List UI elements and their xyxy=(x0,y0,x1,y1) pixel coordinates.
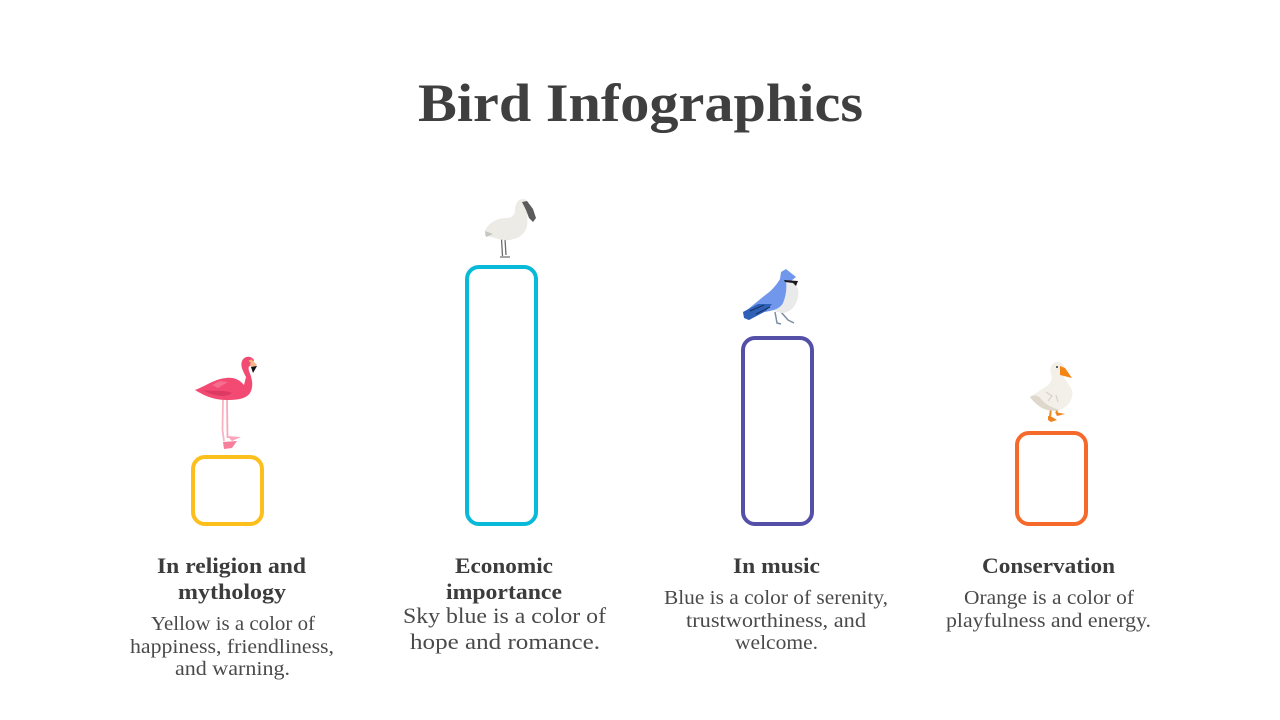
panel: in religion and mythology xyxy=(130,357,334,680)
text: blue description xyxy=(664,587,888,654)
icon: blue jay xyxy=(743,269,798,324)
heading: conservation: Conservation xyxy=(982,553,1115,578)
text: yellow description: and warning. xyxy=(175,658,290,680)
bar: purple outline xyxy=(743,338,812,524)
bar: yellow outline xyxy=(193,457,262,524)
text: orange description xyxy=(946,587,1151,632)
bar: orange outline xyxy=(1017,433,1086,524)
text: sky blue description: hope and romance. xyxy=(410,629,600,654)
text: yellow description: Yellow is a color of xyxy=(151,613,315,635)
text: blue description: trustworthiness, and xyxy=(686,610,866,632)
text: sky blue description xyxy=(403,603,607,654)
heading: economic importance: importance xyxy=(446,579,562,604)
text: orange description: Orange is a color of xyxy=(964,587,1134,609)
text: orange description: playfulness and energy. xyxy=(946,610,1151,632)
heading: economic importance xyxy=(446,553,562,604)
text: sky blue description: Sky blue is a color of xyxy=(403,603,607,628)
panel: economic importance xyxy=(403,199,607,654)
title: Bird Infographics xyxy=(418,73,863,133)
bar: sky blue outline xyxy=(467,267,536,524)
text: blue description: welcome. xyxy=(735,632,818,654)
heading: in religion and mythology: mythology xyxy=(178,579,286,604)
panel: conservation xyxy=(946,362,1151,632)
text: yellow description xyxy=(130,613,334,680)
text: blue description: Blue is a color of serenity, xyxy=(664,587,888,609)
heading: in religion and mythology xyxy=(157,553,306,604)
heading: economic importance: Economic xyxy=(455,553,553,578)
heading: in religion and mythology: In religion and xyxy=(157,553,306,578)
icon: spoonbill xyxy=(485,199,536,257)
panel: in music xyxy=(664,269,888,654)
heading: in music: In music xyxy=(733,553,820,578)
text: yellow description: happiness, friendliness, xyxy=(130,636,334,658)
icon: flamingo xyxy=(195,357,257,449)
icon: goose xyxy=(1030,362,1072,422)
